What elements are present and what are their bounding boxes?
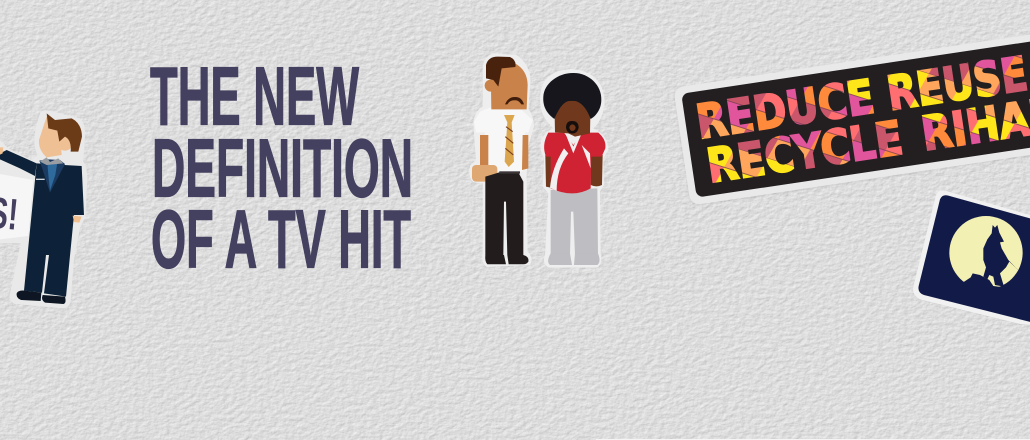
sticker backing [540,69,608,268]
shoes [17,291,41,301]
arms [480,135,488,170]
sticker backing [673,26,1030,206]
title: DEFINITION [152,122,413,214]
shoes [548,253,572,265]
belt [499,171,520,174]
hair [486,57,516,87]
trousers [551,188,598,255]
title [150,50,413,286]
sticker: man with afro in red shirt [540,69,608,268]
moon [949,216,1023,289]
title: THE NEW [150,50,359,142]
suit [24,163,84,297]
shoes [485,255,506,264]
moustache [505,97,524,104]
sticker: reduce reuse recycle rihanna [673,22,1030,206]
shirt [474,108,533,172]
head [491,63,528,109]
trousers [485,172,523,255]
hair [47,113,82,152]
head [39,117,62,157]
shirt stripes [565,133,582,153]
wolf silhouette [961,225,1019,293]
afro [543,73,601,119]
beard [566,121,579,134]
black panel [681,35,1030,198]
tie [504,115,515,167]
sticker: businessman with sign [0,110,87,308]
sticker backing [0,110,87,308]
head [554,100,591,137]
sticker: howling wolf and moon [913,190,1030,325]
slogan text: RECYCLE [703,111,906,194]
sticker backing [913,190,1030,325]
folder [472,165,497,182]
title: OF A TV HIT [151,192,411,286]
hand [73,216,82,223]
red shirt [544,133,606,193]
navy panel [918,195,1030,323]
arms [545,155,554,188]
arm raised [0,150,37,176]
slogan text [693,33,1030,195]
lapels and shirt [39,159,65,193]
slogan text: REDUCE [693,70,878,150]
sticker: man in white shirt [469,54,534,267]
sticker backing [469,54,534,267]
